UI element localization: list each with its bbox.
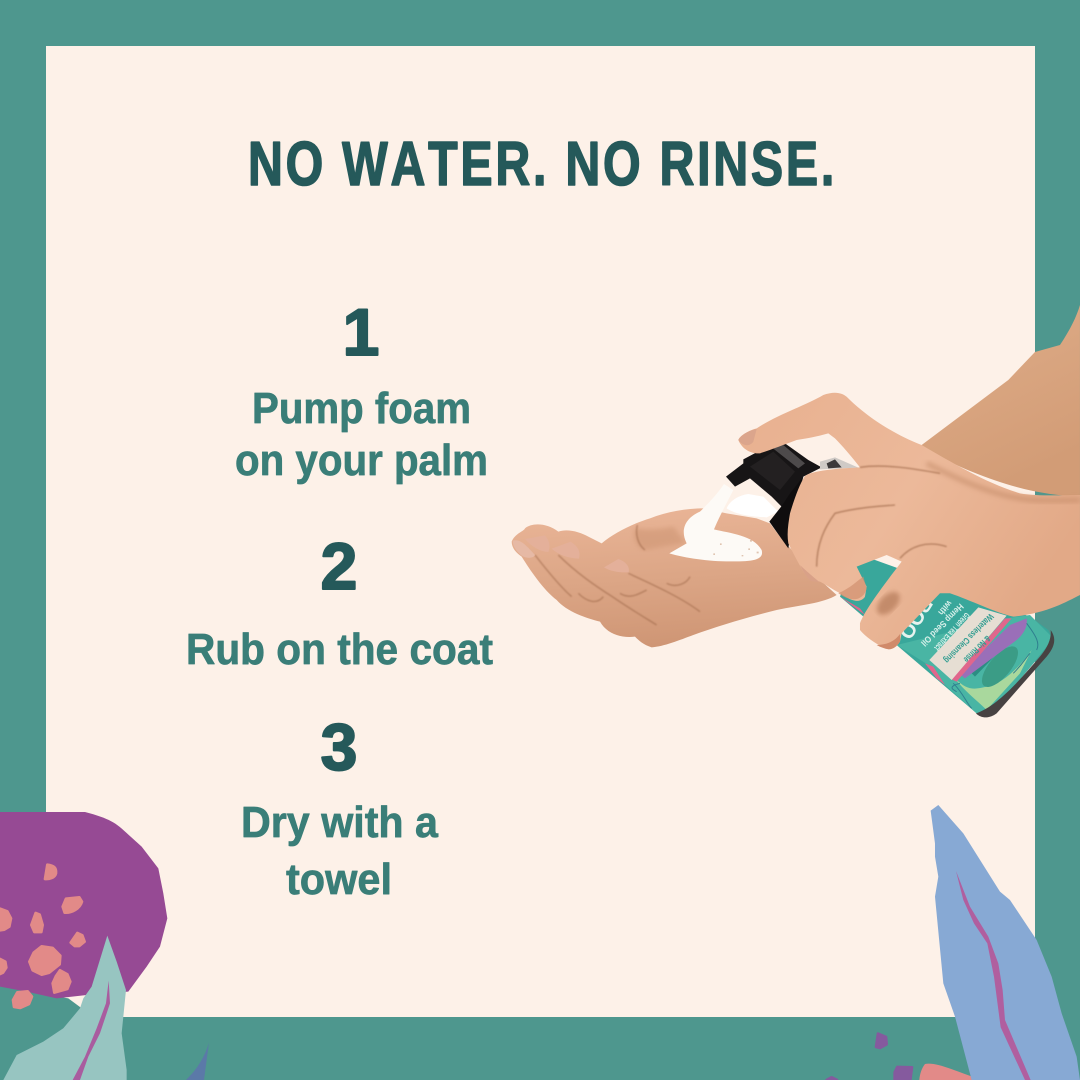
leaf lines xyxy=(952,623,1038,708)
purple blob xyxy=(0,812,167,998)
bottle label text xyxy=(894,593,996,665)
fingertip shade xyxy=(838,577,867,599)
green patch xyxy=(955,650,1032,710)
bottle base xyxy=(976,630,1054,717)
bottle label text: with xyxy=(936,598,955,617)
bottle body xyxy=(840,553,1053,717)
step 1 text: on your palm xyxy=(235,436,488,485)
cupped palm shadow xyxy=(634,527,685,550)
step 3 number: 3 xyxy=(321,710,357,784)
step 3 text: Dry with a xyxy=(241,798,438,847)
wrist tendon shade xyxy=(927,463,1080,500)
palm creases xyxy=(535,525,700,625)
finger creases xyxy=(817,466,947,567)
step 2 xyxy=(186,529,493,674)
step 2 number: 2 xyxy=(321,529,357,603)
dark teal leaf xyxy=(0,987,83,1080)
finger nail xyxy=(800,565,819,582)
bottle label text: POO xyxy=(894,593,936,643)
magenta vein xyxy=(956,871,1031,1080)
pump stem xyxy=(769,477,803,548)
bottle lower pattern xyxy=(897,615,1053,717)
dark label tab xyxy=(970,632,1013,677)
pink spots xyxy=(0,865,85,1008)
step 3 text xyxy=(241,798,438,904)
label panel xyxy=(929,607,1007,680)
step 2 text: Rub on the coat xyxy=(186,625,493,674)
dark blue leaf tip xyxy=(186,1043,209,1080)
dark leaf xyxy=(976,641,1024,693)
fingernails xyxy=(513,535,629,572)
purple stripe xyxy=(959,618,1027,678)
purple spots xyxy=(827,1034,912,1080)
reflection under pump xyxy=(727,494,778,517)
lower knuckle shade xyxy=(873,588,904,619)
photo: hands pumping foam from bottle xyxy=(512,305,1080,717)
magenta vein xyxy=(73,981,110,1080)
step 3 text: towel xyxy=(286,855,392,904)
light teal leaf xyxy=(3,936,127,1080)
receiving hand xyxy=(512,508,837,647)
decoration: bottom left foliage xyxy=(0,812,209,1080)
decoration: bottom right foliage xyxy=(827,805,1080,1080)
bottle xyxy=(840,553,1054,717)
back arm xyxy=(920,305,1080,497)
foam xyxy=(669,484,762,561)
step 1 number: 1 xyxy=(343,295,379,369)
silver pump neck xyxy=(820,457,858,469)
bottle label text: Waterless Cleansing xyxy=(942,612,996,665)
step 3 xyxy=(241,710,438,904)
pump head xyxy=(726,443,858,548)
bottle label text: Green Tea Extract xyxy=(932,611,972,653)
pink stripes xyxy=(840,597,1012,685)
bottle label text: & No Rinse xyxy=(962,634,993,665)
thumb nail xyxy=(738,429,757,445)
bottle label text: Hemp Seed Oil xyxy=(919,602,966,648)
lower fingertip shade xyxy=(877,634,900,649)
pink shape xyxy=(919,1064,982,1080)
step 1 xyxy=(235,295,488,485)
gripping hand xyxy=(738,393,1080,649)
title: NO WATER. NO RINSE. xyxy=(248,129,837,198)
step 1 text xyxy=(235,384,488,485)
blue leaf xyxy=(931,805,1080,1080)
step 1 text: Pump foam xyxy=(252,384,471,433)
